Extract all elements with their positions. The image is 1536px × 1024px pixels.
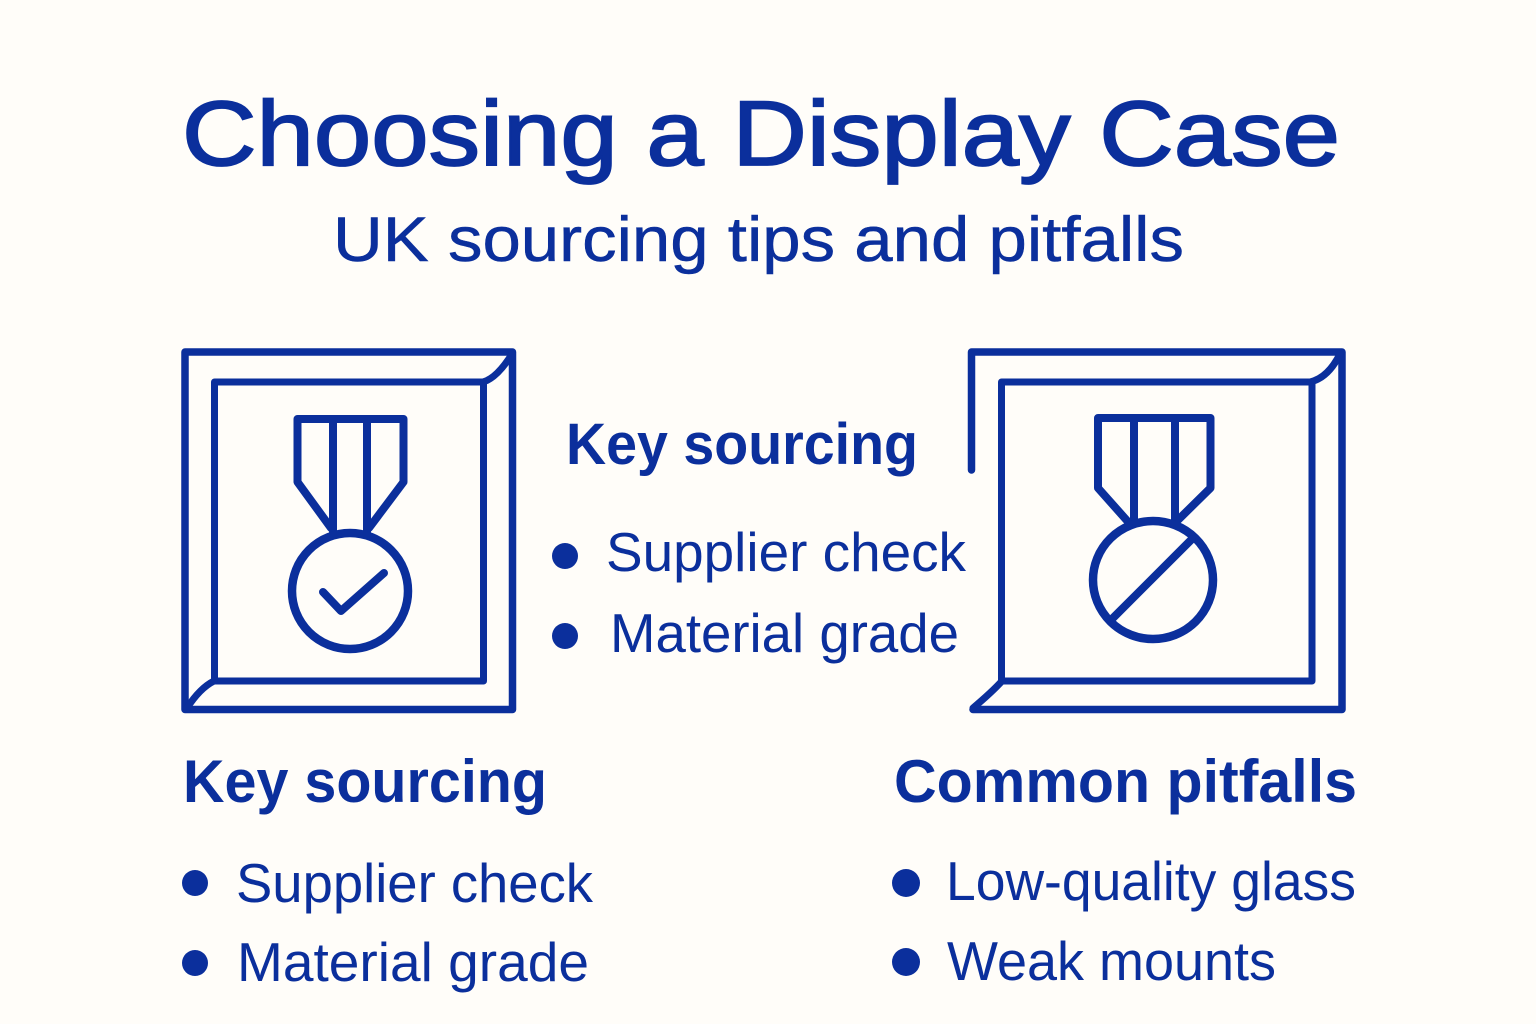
- subtitle: UK sourcing tips and pitfalls: [333, 205, 1184, 275]
- heading: Common pitfalls: [894, 748, 1357, 815]
- bullet item: weak mounts: Weak mounts: [947, 930, 1276, 992]
- frame corners: [973, 354, 1340, 708]
- bullet item: material grade: Material grade: [237, 931, 589, 993]
- ribbon: [298, 419, 404, 532]
- text block: bottom-left key sourcing: [182, 748, 593, 993]
- inner frame: [214, 382, 484, 681]
- bullet item: supplier check: Supplier check: [606, 521, 966, 583]
- text block: bottom-right common pitfalls: [892, 748, 1357, 992]
- panel: key sourcing display case: [185, 352, 512, 710]
- bullet item: low-quality glass: Low-quality glass: [946, 850, 1356, 912]
- medal disc: [1093, 521, 1213, 639]
- slash: [1113, 539, 1192, 618]
- outer frame: [185, 352, 512, 710]
- heading: Key sourcing: [183, 748, 547, 815]
- bullet item: material grade: Material grade: [610, 602, 959, 664]
- heading: Key sourcing: [566, 412, 918, 477]
- medal with check: [292, 419, 408, 649]
- title: Choosing a Display Case: [182, 83, 1340, 185]
- medal disc: [292, 533, 408, 649]
- text block: centre key sourcing: [552, 412, 966, 664]
- frame corners: [187, 354, 512, 708]
- ribbon: [1098, 418, 1210, 524]
- check mark: [323, 573, 384, 611]
- medal with slash: [1093, 418, 1213, 639]
- outer frame: [972, 352, 1342, 710]
- inner frame: [1002, 382, 1312, 681]
- bullet item: supplier check: Supplier check: [236, 852, 593, 914]
- panel: common pitfalls display case: [972, 352, 1342, 710]
